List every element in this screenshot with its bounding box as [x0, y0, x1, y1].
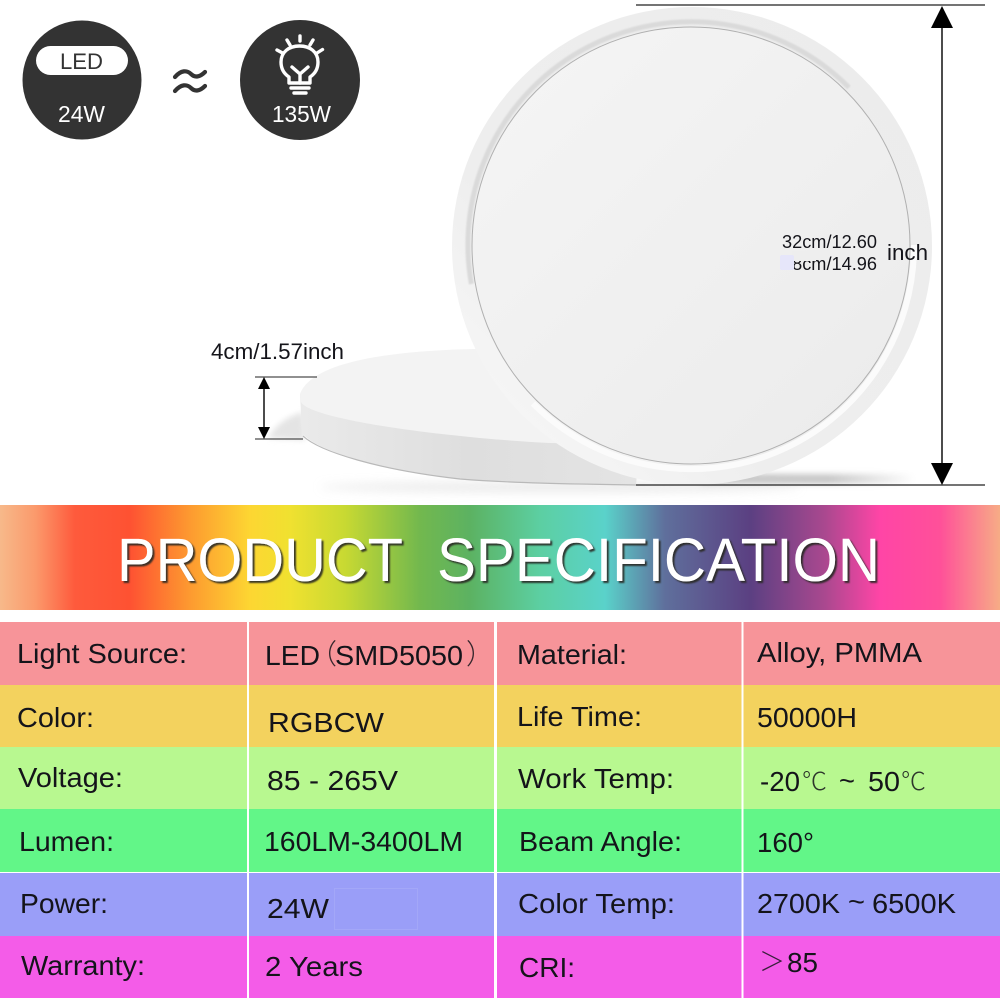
row: light source and material: Alloy, PMMA	[757, 637, 922, 668]
row: lumen and beam angle: 160°	[757, 827, 814, 858]
row: power and color temp: 24W	[267, 893, 330, 924]
row: voltage and work temp: ~	[839, 765, 855, 796]
heading: product specification	[117, 526, 880, 594]
heading: product specification: SPECIFICATION	[437, 526, 880, 594]
row: power and color temp: Color Temp:	[518, 888, 675, 919]
row: warranty and CRI: CRI:	[519, 952, 575, 983]
row: warranty and CRI: 2 Years	[265, 951, 363, 982]
row: light source and material: LED	[265, 640, 320, 671]
row: power and color temp: 6500K	[872, 888, 956, 919]
row: voltage and work temp: 85 - 265V	[267, 765, 398, 796]
row: color and life time	[0, 685, 1000, 747]
icon: light bulb 135W badge: 135W	[272, 101, 331, 127]
row: warranty and CRI: 85	[787, 947, 818, 978]
row: light source and material: （	[309, 633, 337, 673]
product: flat side view of lamp	[300, 349, 640, 485]
row: light source and material: Material:	[517, 639, 627, 670]
dimension: panel height arrow	[636, 5, 985, 485]
row: color and life time: Life Time:	[517, 701, 642, 732]
row: power and color temp: 2700K	[757, 888, 840, 919]
heading: product specification: PRODUCT	[117, 526, 403, 594]
icon: LED 24W badge: 24W	[58, 101, 105, 127]
row: color and life time: 50000H	[757, 702, 857, 733]
dimension label: diameter	[780, 232, 928, 274]
row: warranty and CRI	[0, 936, 1000, 998]
row: voltage and work temp: -20	[760, 766, 800, 797]
dimension: thickness arrow and label	[211, 339, 344, 439]
row: voltage and work temp: 50	[868, 766, 900, 797]
icon: LED 24W badge: LED	[60, 49, 103, 74]
icon: approximately equal sign	[175, 71, 205, 91]
row: lumen and beam angle: Beam Angle:	[519, 826, 682, 857]
row: light source and material	[0, 622, 1000, 685]
row: lumen and beam angle: Lumen:	[19, 826, 114, 857]
row: voltage and work temp: ℃	[802, 762, 827, 798]
dimension label: diameter: 38cm/14.96	[782, 254, 877, 274]
row: lumen and beam angle	[0, 809, 1000, 872]
product: round lamp front panel	[452, 7, 932, 485]
dimension label: diameter: 32cm/12.60	[782, 232, 877, 252]
row: power and color temp: ~	[848, 886, 865, 917]
row: warranty and CRI: ＞	[759, 942, 785, 979]
row: voltage and work temp	[0, 747, 1000, 809]
row: color and life time: RGBCW	[268, 707, 385, 738]
icon: LED 24W badge	[22, 20, 142, 140]
icon: light bulb 135W badge	[240, 20, 360, 140]
dimension: thickness arrow and label: 4cm/1.57inch	[211, 339, 344, 364]
row: light source and material: Light Source:	[17, 638, 187, 669]
row: color and life time: Color:	[17, 702, 94, 733]
row: power and color temp: Power:	[20, 888, 108, 919]
dimension label: diameter: inch	[887, 240, 928, 265]
floor shadow	[268, 412, 915, 492]
row: voltage and work temp: Work Temp:	[518, 763, 674, 794]
row: light source and material: ）	[466, 633, 494, 673]
banner: rainbow heading strip	[0, 505, 1000, 610]
row: voltage and work temp: Voltage:	[18, 762, 123, 793]
row: voltage and work temp: ℃	[901, 762, 926, 798]
row: warranty and CRI: Warranty:	[21, 950, 145, 981]
spec table	[0, 622, 1000, 998]
row: power and color temp	[0, 873, 1000, 936]
row: lumen and beam angle: 160LM-3400LM	[264, 826, 463, 857]
row: light source and material: SMD5050	[335, 640, 463, 671]
